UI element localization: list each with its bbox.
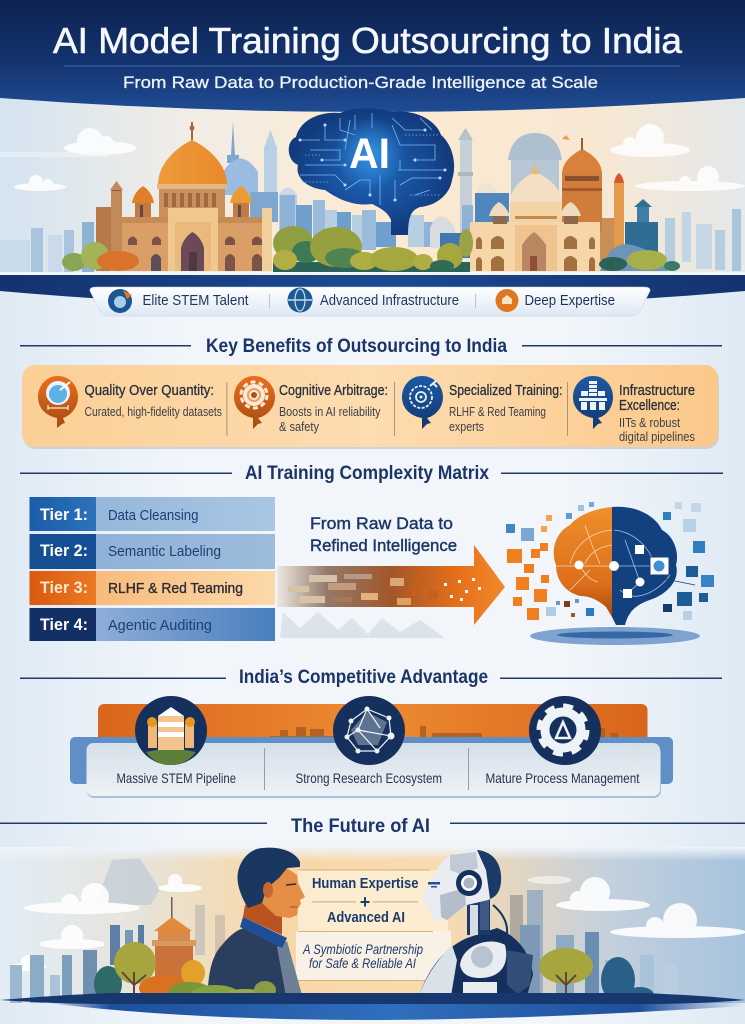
tier 1: Data Cleansing xyxy=(108,507,198,524)
figure: human xyxy=(191,848,305,1003)
panel: key benefits xyxy=(22,365,719,449)
feature pill xyxy=(90,287,650,316)
text: from raw data to refined intelligence: From Raw Data to xyxy=(310,514,453,533)
head xyxy=(422,850,501,922)
torso xyxy=(417,928,533,1002)
centre message panel: A Symbiotic Partnership xyxy=(302,941,423,957)
skyline right xyxy=(510,890,677,1003)
benefit: specialized training: RLHF & Red Teaming xyxy=(449,404,546,419)
arrow: raw data to intelligence xyxy=(277,545,505,638)
benefit: infrastructure excellence: IITs & robust xyxy=(619,415,680,430)
benefit: specialized training: Specialized Training: xyxy=(449,382,562,399)
mountains xyxy=(280,612,445,638)
advantage: process management xyxy=(486,696,640,786)
trees left xyxy=(94,942,212,1002)
tier 2 xyxy=(30,534,275,569)
tier 1: Tier 1: xyxy=(40,505,88,524)
feature strip band: Deep Expertise xyxy=(524,292,615,309)
icon: split brain xyxy=(506,502,714,645)
section heading: key benefits: Key Benefits of Outsourcing to India xyxy=(206,336,507,357)
header band xyxy=(0,0,745,112)
future illustration background xyxy=(0,847,745,1003)
benefit: quality over quantity: Curated, high-fidelity datasets xyxy=(84,404,222,419)
benefit: cognitive arbitrage xyxy=(234,376,388,434)
right palace xyxy=(470,138,668,271)
icon: STEM talent xyxy=(108,289,132,313)
feature strip band xyxy=(0,272,745,316)
benefit: cognitive arbitrage: & safety xyxy=(279,419,319,434)
centre message panel xyxy=(296,870,451,981)
advantage: STEM pipeline: Massive STEM Pipeline xyxy=(116,770,236,786)
panel: competitive advantage xyxy=(70,696,673,798)
trees right xyxy=(539,948,654,1003)
tier 2: Semantic Labeling xyxy=(108,543,221,560)
hero illustration: Indian skyline xyxy=(0,96,745,274)
section heading: future of AI: The Future of AI xyxy=(291,815,430,837)
centre message panel: Human Expertise xyxy=(312,875,418,892)
benefit: infrastructure excellence: Excellence: xyxy=(619,397,680,414)
section heading: complexity matrix: AI Training Complexity Matrix xyxy=(245,463,489,484)
figure: robot xyxy=(417,850,533,1002)
subtitle: From Raw Data to Production-Grade Intelligence at Scale xyxy=(123,74,598,92)
temple xyxy=(152,897,196,990)
title: AI Model Training Outsourcing to India xyxy=(53,20,683,61)
advantage: process management: Mature Process Management xyxy=(486,770,640,786)
benefit: quality over quantity: Quality Over Quantity: xyxy=(84,382,214,399)
benefit: specialized training: experts xyxy=(449,419,484,434)
tier 4: Tier 4: xyxy=(40,615,88,634)
tier 3: Tier 3: xyxy=(40,578,88,597)
tier 3 xyxy=(30,571,275,605)
tier 2: Tier 2: xyxy=(40,541,88,560)
tier 1 xyxy=(30,497,275,531)
advantage: research ecosystem: Strong Research Ecosystem xyxy=(296,770,442,786)
tier 4: Agentic Auditing xyxy=(108,617,212,634)
clouds in the sky xyxy=(0,124,745,191)
centre message panel: for Safe & Reliable AI xyxy=(309,955,416,971)
icon: circuit brain with AI xyxy=(289,108,454,235)
tier 4 xyxy=(30,608,275,641)
feature strip band: Elite STEM Talent xyxy=(142,292,249,309)
tier 3: RLHF & Red Teaming xyxy=(108,580,243,597)
skyline left xyxy=(10,905,225,1003)
bottom swoosh xyxy=(0,993,745,1020)
section heading: competitive advantage: India’s Competitive Advantage xyxy=(239,667,488,688)
benefit: cognitive arbitrage: Boosts in AI reliability xyxy=(279,404,381,419)
feature strip band: Advanced Infrastructure xyxy=(320,292,459,309)
benefit: infrastructure excellence: digital pipelines xyxy=(619,429,695,444)
centre message panel: Advanced AI xyxy=(327,909,405,926)
icon: expertise xyxy=(496,289,518,312)
text: from raw data to refined intelligence xyxy=(310,514,457,555)
tier table xyxy=(30,497,275,641)
advantage: STEM pipeline xyxy=(116,696,236,786)
left palace xyxy=(96,122,272,271)
icon: circuit brain with AI: AI xyxy=(349,130,390,178)
distant blue skyline left xyxy=(0,122,436,272)
benefit: infrastructure excellence xyxy=(573,376,695,444)
benefit: specialized training xyxy=(402,376,562,434)
benefit: quality over quantity xyxy=(38,376,222,428)
centre message panel: + xyxy=(360,892,370,912)
trees in the foreground xyxy=(62,226,680,272)
jacket xyxy=(208,928,292,1002)
icon: infrastructure globe xyxy=(288,288,312,312)
benefit: cognitive arbitrage: Cognitive Arbitrage: xyxy=(279,382,388,399)
distant grey buildings right xyxy=(430,128,741,271)
text: from raw data to refined intelligence: Refined Intelligence xyxy=(310,536,457,555)
benefit: infrastructure excellence: Infrastructure xyxy=(619,382,695,399)
advantage: research ecosystem xyxy=(296,696,442,786)
clouds xyxy=(10,874,745,971)
